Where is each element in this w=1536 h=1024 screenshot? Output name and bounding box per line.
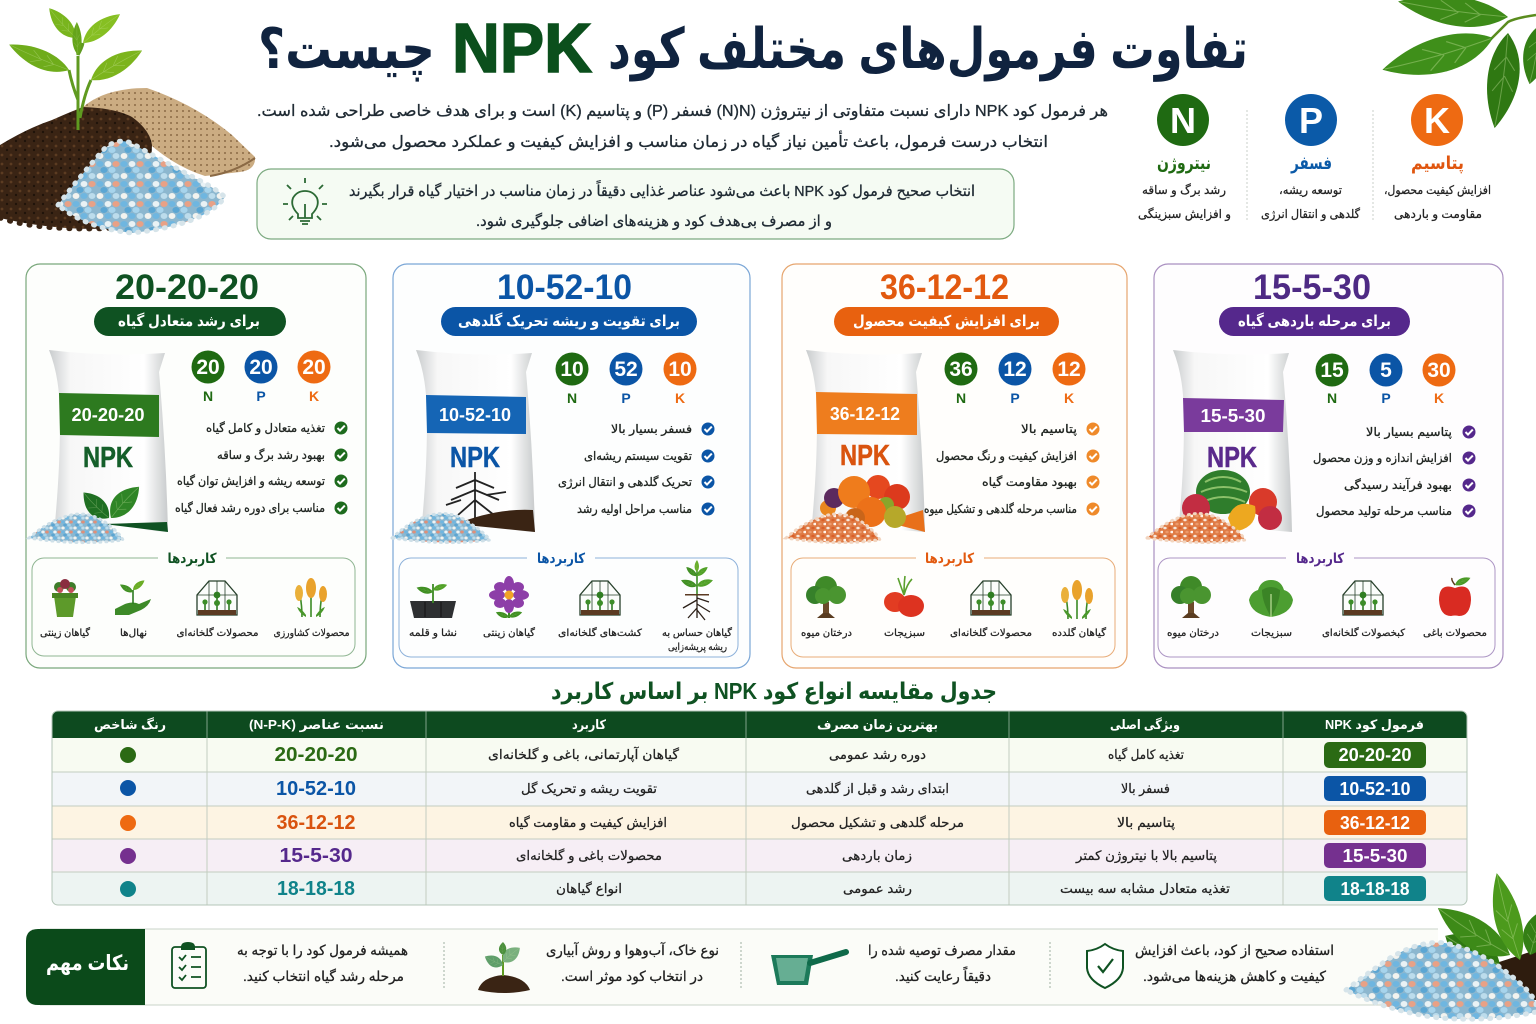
nutrient: nitrogen: و افزایش سبزینگی: [1138, 207, 1231, 222]
benefits list: تقویت سیستم ریشه‌ای: [584, 449, 692, 464]
table row: 36-12-12: پتاسیم بالا: [1117, 815, 1175, 831]
NPK values: 52: [614, 358, 638, 381]
table header row: رنگ شاخص: [94, 717, 166, 732]
applications box: محصولات گلخانه‌ای: [950, 627, 1032, 639]
NPK values: 10: [668, 358, 692, 381]
note: dosage: [771, 942, 1016, 985]
table row: 20-20-20: 20-20-20: [274, 744, 358, 766]
nutrient: potassium: پتاسیم: [1411, 153, 1464, 174]
panel: formula 15-5-30: [1147, 264, 1503, 668]
table row: 18-18-18: تغذیه متعادل مشابه سه بیست: [1060, 881, 1230, 896]
note: dosage: دقیقاً رعایت کنید.: [895, 966, 991, 985]
note: soil and climate: در انتخاب کود موثر است.: [561, 968, 703, 985]
applications box: محصولات باغی: [1423, 628, 1487, 639]
formula heading: 36-12-12: [880, 268, 1009, 307]
benefits list: پتاسیم بالا: [1021, 422, 1077, 436]
benefits list: [558, 422, 714, 517]
applications box: نهال‌ها: [120, 628, 147, 639]
callout: correct formula tip: انتخاب صحیح فرمول کود NPK باعث می‌شود عناصر غذایی دقیقاً در زمان مناسب در اختیار گیاه قرار بگیرند: [349, 180, 975, 200]
fertilizer bag: 10-52-10: [439, 405, 511, 425]
benefits list: بهبود مقاومت گیاه: [982, 475, 1077, 490]
panel: formula 36-12-12: [782, 264, 1127, 668]
table row: 10-52-10: 10-52-10: [276, 778, 356, 800]
benefits list: [175, 421, 348, 516]
NPK values: 5: [1380, 359, 1392, 382]
NPK values: N: [203, 388, 213, 404]
table row: 20-20-20: 20-20-20: [1338, 745, 1412, 765]
formula heading: 10-52-10: [497, 268, 632, 307]
fertilizer bag: NPK: [450, 442, 500, 474]
subtitle pill: [441, 307, 697, 336]
table header row: [94, 717, 1424, 732]
applications box: کاربردها: [168, 550, 217, 567]
subtitle pill: [834, 307, 1059, 336]
fertilizer bag: NPK: [1207, 442, 1257, 474]
panel: formula 20-20-20: [26, 264, 366, 668]
applications box: [1158, 550, 1495, 657]
note: correct use: [1087, 942, 1334, 988]
panel: formula 10-52-10: [392, 264, 750, 668]
table row: 10-52-10: 10-52-10: [1340, 779, 1410, 799]
comparison table: [52, 711, 1467, 905]
subtitle pill: برای مرحله باردهی گیاه: [1238, 312, 1391, 330]
table header row: فرمول کود NPK: [1325, 717, 1424, 732]
nutrient: phosphorus: گلدهی و انتقال انرژی: [1261, 207, 1360, 222]
table heading: جدول مقایسه انواع کود NPK بر اساس کاربرد: [551, 678, 997, 705]
subtitle pill: [94, 307, 286, 336]
NPK values: 10: [560, 358, 584, 381]
note: growth stage: همیشه فرمول کود را با توجه به: [237, 942, 408, 959]
table row: 18-18-18: 18-18-18: [1340, 879, 1410, 899]
NPK values: P: [1381, 390, 1391, 406]
nutrient: nitrogen: N: [1170, 100, 1196, 141]
note: dosage: مقدار مصرف توصیه شده را: [868, 942, 1016, 959]
benefits list: [924, 422, 1100, 517]
benefits list: مناسب مرحله تولید محصول: [1316, 504, 1452, 519]
benefits list: مناسب برای دوره رشد فعال گیاه: [175, 501, 325, 516]
benefits list: فسفر بسیار بالا: [611, 422, 692, 437]
table row: 15-5-30: زمان باردهی: [842, 848, 912, 864]
subtitle pill: برای رشد متعادل گیاه: [118, 312, 260, 330]
benefits list: افزایش اندازه و وزن محصول: [1313, 451, 1452, 466]
benefits list: تحریک گلدهی و انتقال انرژی: [558, 475, 692, 490]
table header row: ویژگی اصلی: [1110, 717, 1180, 732]
table row: 15-5-30: محصولات باغی و گلخانه‌ای: [516, 848, 662, 864]
applications box: گیاهان حساس به: [662, 627, 732, 639]
benefits list: بهبود فرآیند رسیدگی: [1344, 477, 1452, 493]
illustration: soil, sack and fertilizer granules with seedling: [0, 4, 255, 233]
NPK values: [1316, 354, 1456, 406]
benefits list: تغذیه متعادل و کامل گیاه: [206, 421, 325, 436]
NPK values: K: [675, 390, 685, 406]
notes label: [26, 929, 145, 1005]
table row: 36-12-12: 36-12-12: [276, 812, 356, 834]
nutrient: potassium: [1384, 94, 1491, 222]
table row: 15-5-30: [120, 843, 1426, 868]
table row: 36-12-12: افزایش کیفیت و مقاومت گیاه: [509, 815, 667, 831]
note: growth stage: مرحله رشد گیاه انتخاب کنید.: [243, 968, 404, 985]
nutrient: potassium: افزایش کیفیت محصول،: [1384, 183, 1491, 198]
NPK values: [556, 352, 696, 406]
fertilizer bag: [786, 350, 925, 543]
benefits list: مناسب مراحل اولیه رشد: [577, 502, 692, 517]
title: NPK: [452, 9, 592, 87]
applications box: درختان میوه: [1167, 628, 1219, 639]
fertilizer bag: 15-5-30: [1200, 406, 1266, 426]
panel: important notes: [26, 929, 1438, 1005]
NPK values: 36: [949, 358, 973, 381]
icon: light bulb: [283, 178, 327, 224]
subtitle pill: برای تقویت و ریشه تحریک گلدهی: [458, 312, 680, 330]
intro paragraph: انتخاب درست فرمول، باعث تأمین نیاز گیاه در زمان مناسب و افزایش کیفیت و عملکرد محصول می‌شود.: [329, 130, 1048, 152]
applications box: درختان میوه: [801, 628, 852, 639]
intro paragraph: هر فرمول کود NPK دارای نسبت متفاوتی از نیتروژن ⁦(N)N)⁩ فسفر (P) و پتاسیم (K) است و برای هدف خاصی طراحی شده است.: [257, 103, 1108, 121]
benefits list: [1313, 425, 1476, 519]
nutrient: potassium: مقاومت و باردهی: [1394, 207, 1482, 222]
applications box: محصولات کشاورزی: [274, 628, 350, 639]
panel: nutrient legend: [1138, 94, 1491, 222]
applications box: کاربردها: [925, 550, 975, 567]
callout: correct formula tip: [257, 169, 1014, 239]
table row: 10-52-10: تقویت ریشه و تحریک گل: [521, 781, 657, 797]
subtitle pill: [1219, 307, 1410, 336]
NPK values: N: [567, 390, 577, 406]
title: چیست؟: [258, 17, 435, 82]
table row: 18-18-18: [120, 876, 1426, 901]
note: correct use: کیفیت و کاهش هزینه‌ها می‌شود.: [1143, 968, 1326, 985]
NPK values: P: [1010, 390, 1020, 406]
applications box: نشا و قلمه: [409, 628, 457, 639]
table row: 18-18-18: انواع گیاهان: [556, 881, 622, 897]
fertilizer bag: [392, 350, 535, 543]
applications box: گیاهان زینتی: [483, 627, 535, 639]
fertilizer bag: NPK: [83, 442, 133, 474]
applications box: سبزیجات: [1251, 628, 1292, 639]
table header row: نسبت عناصر (N-P-K): [249, 717, 384, 732]
nutrient: potassium: K: [1424, 100, 1450, 141]
applications box: سبزیجات: [884, 628, 925, 639]
nutrient: nitrogen: رشد برگ و ساقه: [1142, 183, 1226, 198]
table row: 20-20-20: گیاهان آپارتمانی، باغی و گلخانه‌ای: [488, 746, 680, 763]
NPK values: 20: [249, 356, 273, 379]
note: soil and climate: [444, 942, 1050, 993]
illustration: bottom right granules with plant: [1346, 870, 1536, 1019]
applications box: ریشه پریشه‌زایی: [668, 642, 727, 653]
note: growth stage: [172, 942, 408, 988]
illustration: top right leaves: [1378, 0, 1536, 130]
table row: 20-20-20: تغذیه کامل گیاه: [1108, 747, 1184, 762]
applications box: کبخصولات گلخانه‌ای: [1322, 627, 1405, 639]
nutrient: phosphorus: [1261, 94, 1360, 222]
note: correct use: استفاده صحیح از کود، باعث افزایش: [1135, 942, 1334, 959]
table row: 18-18-18: رشد عمومی: [843, 881, 912, 897]
nutrient: phosphorus: P: [1299, 100, 1323, 141]
notes label: نکات مهم: [46, 952, 129, 975]
benefits list: پتاسیم بسیار بالا: [1366, 425, 1452, 440]
table row: 20-20-20: [120, 742, 1426, 768]
NPK values: N: [956, 390, 966, 406]
applications box: گیاهان زینتی: [40, 627, 90, 639]
title: تفاوت فرمول‌های مختلف کود: [608, 17, 1248, 82]
intro paragraph: [257, 103, 1108, 152]
NPK values: 12: [1057, 358, 1081, 381]
table row: 18-18-18: 18-18-18: [277, 878, 355, 900]
applications box: گیاهان گلدده: [1052, 627, 1106, 639]
applications box: محصولات گلخانه‌ای: [176, 627, 258, 639]
nutrient: nitrogen: [1138, 94, 1231, 222]
NPK values: [192, 350, 330, 404]
table header row: کاربرد: [572, 717, 606, 732]
table row: 36-12-12: 36-12-12: [1340, 813, 1410, 833]
fertilizer bag: [29, 350, 168, 543]
title: [258, 9, 1248, 87]
table row: 15-5-30: 15-5-30: [1342, 846, 1408, 866]
table row: 10-52-10: ابتدای رشد و قبل از گلدهی: [806, 781, 949, 797]
formula heading: 15-5-30: [1253, 268, 1371, 307]
nutrient: phosphorus: فسفر: [1290, 153, 1332, 174]
NPK values: K: [1064, 390, 1074, 406]
formula heading: 20-20-20: [115, 268, 259, 307]
applications box: [32, 550, 355, 656]
NPK values: 12: [1003, 358, 1027, 381]
table row: 15-5-30: پتاسیم بالا با نیتروژن کمتر: [1075, 848, 1217, 864]
fertilizer bag: NPK: [840, 440, 890, 472]
callout: correct formula tip: و از مصرف بی‌هدف کود و هزینه‌های اضافی جلوگیری شود.: [476, 212, 832, 230]
NPK values: 20: [196, 356, 220, 379]
NPK values: N: [1327, 390, 1337, 406]
NPK values: K: [309, 388, 319, 404]
applications box: کشت‌های گلخانه‌ای: [558, 627, 642, 639]
NPK values: P: [256, 388, 266, 404]
benefits list: بهبود رشد برگ و ساقه: [217, 448, 325, 463]
fertilizer bag: [1147, 350, 1292, 543]
applications box: [399, 550, 738, 657]
NPK values: 30: [1427, 359, 1451, 382]
fertilizer bag: 20-20-20: [72, 405, 144, 425]
table header row: بهترین زمان مصرف: [817, 717, 938, 732]
table row: 20-20-20: دوره رشد عمومی: [829, 747, 926, 763]
NPK values: 20: [302, 356, 326, 379]
benefits list: مناسب مرحله گلدهی و تشکیل میوه: [924, 502, 1077, 517]
benefits list: توسعه ریشه و افزایش توان گیاه: [177, 474, 325, 489]
table row: 15-5-30: 15-5-30: [280, 845, 352, 867]
applications box: کاربردها: [537, 550, 586, 567]
table row: 36-12-12: [120, 810, 1426, 835]
NPK values: [944, 352, 1086, 406]
table row: 10-52-10: [120, 776, 1426, 801]
nutrient: phosphorus: توسعه ریشه،: [1279, 183, 1342, 198]
benefits list: افزایش کیفیت و رنگ محصول: [936, 449, 1077, 464]
NPK values: 15: [1320, 359, 1344, 382]
applications box: کاربردها: [1296, 550, 1345, 567]
nutrient: nitrogen: نیتروژن: [1157, 153, 1211, 174]
NPK values: P: [621, 390, 631, 406]
subtitle pill: برای افزایش کیفیت محصول: [853, 313, 1040, 330]
note: soil and climate: نوع خاک، آب‌وهوا و روش آبیاری: [546, 942, 719, 959]
table row: 10-52-10: فسفر بالا: [1121, 781, 1170, 797]
table row: 36-12-12: مرحله گلدهی و تشکیل محصول: [791, 815, 964, 831]
applications box: [791, 550, 1115, 657]
NPK values: K: [1434, 390, 1444, 406]
fertilizer bag: 36-12-12: [830, 404, 900, 424]
